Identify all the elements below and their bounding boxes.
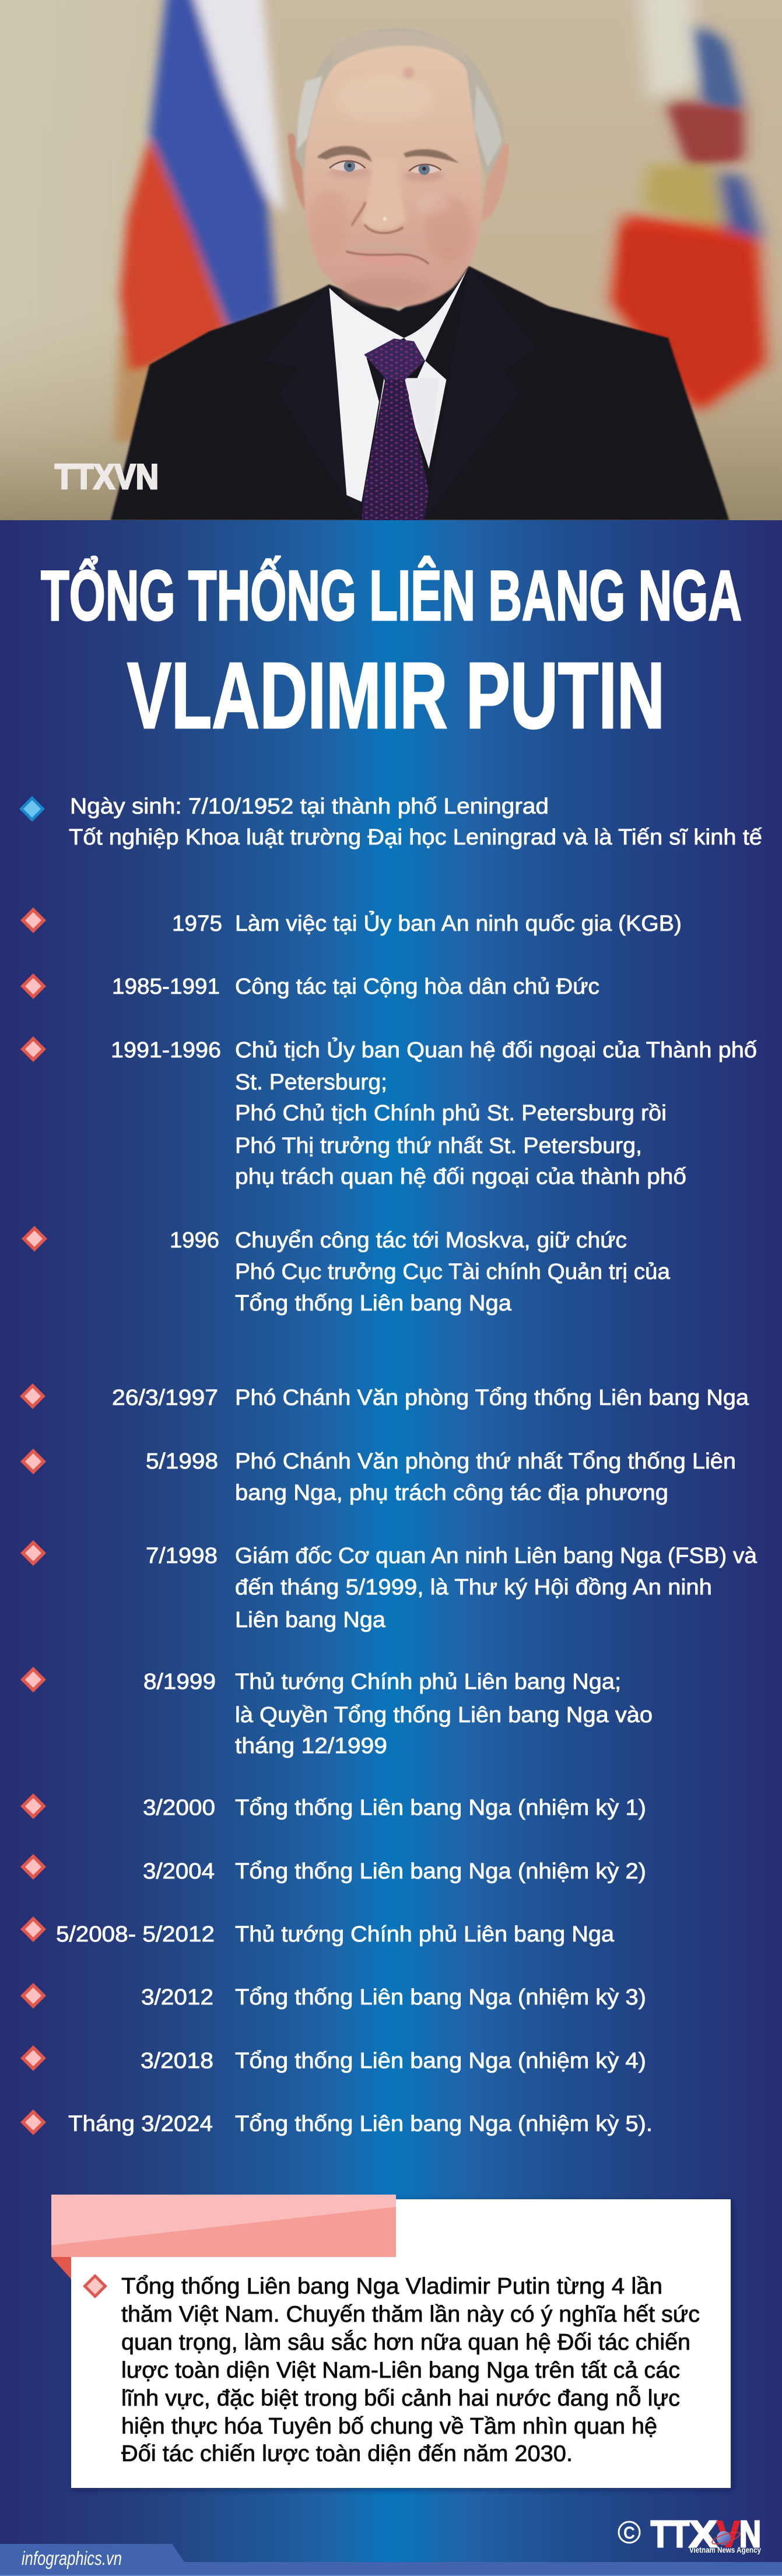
timeline entry 1991-1996: phụ trách quan hệ đối ngoại của thành phố bbox=[235, 1165, 686, 1189]
logo: copyright TTXVN Vietnam News Agency bbox=[619, 2513, 761, 2555]
face bbox=[304, 45, 482, 307]
timeline entry 7/1998 bbox=[20, 1540, 758, 1632]
timeline entry Tháng 3/2024: Tháng 3/2024 bbox=[68, 2112, 213, 2136]
icon: blue diamond bbox=[19, 796, 45, 822]
timeline entry 3/2004: Tổng thống Liên bang Nga (nhiệm kỳ 2) bbox=[235, 1859, 646, 1884]
brows and eyes bbox=[317, 146, 460, 181]
callout pink ribbon bbox=[51, 2195, 396, 2279]
copyright mark bbox=[619, 2522, 640, 2543]
timeline entry 5/2008-5/2012 bbox=[20, 1916, 615, 1947]
timeline entry 7/1998: Liên bang Nga bbox=[235, 1608, 386, 1632]
wordmark: TT bbox=[651, 2513, 689, 2555]
timeline entry 3/2012: 3/2012 bbox=[141, 1985, 213, 2010]
photo: portrait of Vladimir Putin with flags bbox=[0, 0, 782, 520]
timeline entry 1991-1996: Phó Chủ tịch Chính phủ St. Petersburg rồi bbox=[235, 1101, 667, 1126]
callout text: hiện thực hóa Tuyên bố chung về Tầm nhìn quan hệ bbox=[121, 2414, 657, 2439]
wordmark: V bbox=[717, 2513, 740, 2555]
timeline entry 1996 bbox=[22, 1226, 671, 1316]
callout white card bbox=[71, 2199, 731, 2488]
timeline entry 3/2000: Tổng thống Liên bang Nga (nhiệm kỳ 1) bbox=[235, 1796, 646, 1820]
timeline entry 3/2000 bbox=[20, 1793, 646, 1820]
timeline entry 1996: 1996 bbox=[170, 1228, 219, 1253]
timeline entry 26/3/1997 bbox=[20, 1383, 749, 1410]
timeline entry 1991-1996: St. Petersburg; bbox=[235, 1070, 387, 1095]
wordmark: X bbox=[689, 2513, 717, 2555]
nose and mouth bbox=[346, 157, 429, 266]
icon: red outlined diamond bbox=[83, 2274, 107, 2298]
agency name: Vietnam News Agency bbox=[689, 2546, 761, 2554]
timeline entry 5/2008-5/2012: 5/2008- 5/2012 bbox=[56, 1922, 215, 1947]
timeline entry Tháng 3/2024 bbox=[20, 2109, 653, 2136]
title bbox=[41, 555, 742, 748]
callout text: Đối tác chiến lược toàn diện đến năm 2030. bbox=[121, 2441, 573, 2466]
timeline entry 5/1998 bbox=[20, 1449, 736, 1505]
timeline entry 26/3/1997: Phó Chánh Văn phòng Tổng thống Liên bang Nga bbox=[235, 1386, 749, 1410]
timeline entry 5/2008-5/2012: Thủ tướng Chính phủ Liên bang Nga bbox=[235, 1922, 615, 1947]
timeline entry 3/2004 bbox=[20, 1854, 646, 1884]
callout text: Tổng thống Liên bang Nga Vladimir Putin từng 4 lần bbox=[121, 2274, 662, 2299]
timeline entry 1991-1996 bbox=[20, 1036, 757, 1189]
timeline entry 1996: Chuyển công tác tới Moskva, giữ chức bbox=[235, 1228, 627, 1253]
ears bbox=[287, 133, 305, 210]
timeline entry 7/1998: 7/1998 bbox=[146, 1544, 218, 1568]
wordmark bbox=[651, 2513, 761, 2555]
timeline entry 8/1999 bbox=[20, 1667, 653, 1758]
timeline entry 1985-1991: 1985-1991 bbox=[112, 975, 220, 999]
copyright mark: C bbox=[623, 2524, 635, 2543]
timeline entry 3/2012 bbox=[20, 1983, 646, 2010]
face shading bbox=[309, 68, 472, 303]
footer band with site name bbox=[0, 2544, 782, 2576]
birth and education block bbox=[19, 794, 762, 850]
timeline entry 1985-1991: Công tác tại Cộng hòa dân chủ Đức bbox=[235, 975, 599, 999]
callout text: thăm Việt Nam. Chuyến thăm lần này có ý nghĩa hết sức bbox=[121, 2302, 700, 2327]
timeline entry 3/2018: 3/2018 bbox=[141, 2049, 213, 2073]
education text: Tốt nghiệp Khoa luật trường Đại học Leningrad và là Tiến sĩ kinh tế bbox=[69, 825, 762, 850]
callout text: quan trọng, làm sâu sắc hơn nữa quan hệ Đối tác chiến bbox=[121, 2330, 690, 2355]
shirt bbox=[329, 288, 404, 502]
timeline entry 1975: 1975 bbox=[172, 912, 222, 936]
watermark logo on photo: TTXVN bbox=[55, 457, 159, 496]
timeline entry 1991-1996: 1991-1996 bbox=[111, 1038, 221, 1063]
panel: callout about visits to Vietnam bbox=[51, 2195, 731, 2488]
tie bbox=[364, 339, 425, 380]
wordmark: N bbox=[739, 2513, 761, 2555]
timeline entry 3/2012: Tổng thống Liên bang Nga (nhiệm kỳ 3) bbox=[235, 1985, 646, 2010]
timeline entry 8/1999: là Quyền Tổng thống Liên bang Nga vào bbox=[235, 1703, 653, 1727]
timeline entry 7/1998: đến tháng 5/1999, là Thư ký Hội đồng An ninh bbox=[235, 1575, 712, 1600]
timeline entry 1991-1996: Chủ tịch Ủy ban Quan hệ đối ngoại của Thành phố bbox=[235, 1037, 757, 1063]
timeline entry 1996: Phó Cục trưởng Cục Tài chính Quản trị của bbox=[235, 1260, 671, 1284]
background gradient bbox=[0, 516, 782, 2576]
timeline entry 5/1998: Phó Chánh Văn phòng thứ nhất Tổng thống Liên bbox=[235, 1449, 736, 1474]
birth text: Ngày sinh: 7/10/1952 tại thành phố Leningrad bbox=[70, 794, 549, 819]
timeline entry 1975: Làm việc tại Ủy ban An ninh quốc gia (KGB) bbox=[235, 910, 682, 936]
timeline entry 1985-1991 bbox=[20, 973, 599, 999]
callout text: lĩnh vực, đặc biệt trong bối cảnh hai nước đang nỗ lực bbox=[121, 2386, 680, 2411]
left flag bbox=[115, 0, 284, 441]
timeline entry 1975 bbox=[20, 907, 682, 936]
timeline entry 26/3/1997: 26/3/1997 bbox=[112, 1386, 218, 1410]
suit bbox=[111, 266, 729, 520]
timeline entry 8/1999: 8/1999 bbox=[143, 1670, 216, 1694]
callout text bbox=[121, 2274, 700, 2466]
hair bbox=[295, 28, 504, 179]
site name: infographics.vn bbox=[22, 2547, 122, 2569]
timeline entry 8/1999: tháng 12/1999 bbox=[235, 1734, 387, 1758]
right flag bbox=[611, 0, 766, 413]
timeline entry 8/1999: Thủ tướng Chính phủ Liên bang Nga; bbox=[235, 1670, 621, 1694]
timeline entry 3/2018: Tổng thống Liên bang Nga (nhiệm kỳ 4) bbox=[235, 2049, 646, 2073]
timeline entry 1996: Tổng thống Liên bang Nga bbox=[235, 1291, 512, 1316]
timeline entry 5/1998: 5/1998 bbox=[146, 1449, 218, 1474]
timeline entry 7/1998: Giám đốc Cơ quan An ninh Liên bang Nga (FSB) và bbox=[235, 1544, 758, 1568]
timeline entry 3/2018 bbox=[20, 2045, 646, 2073]
head of the portrait bbox=[287, 28, 509, 307]
timeline entry Tháng 3/2024: Tổng thống Liên bang Nga (nhiệm kỳ 5). bbox=[235, 2112, 653, 2136]
timeline entry 5/1998: bang Nga, phụ trách công tác địa phương bbox=[235, 1481, 668, 1505]
timeline entry 3/2000: 3/2000 bbox=[143, 1796, 215, 1820]
callout text: lược toàn diện Việt Nam-Liên bang Nga trên tất cả các bbox=[121, 2358, 680, 2383]
timeline entry 1991-1996: Phó Thị trưởng thứ nhất St. Petersburg, bbox=[235, 1134, 642, 1158]
timeline entry 3/2004: 3/2004 bbox=[143, 1859, 215, 1884]
